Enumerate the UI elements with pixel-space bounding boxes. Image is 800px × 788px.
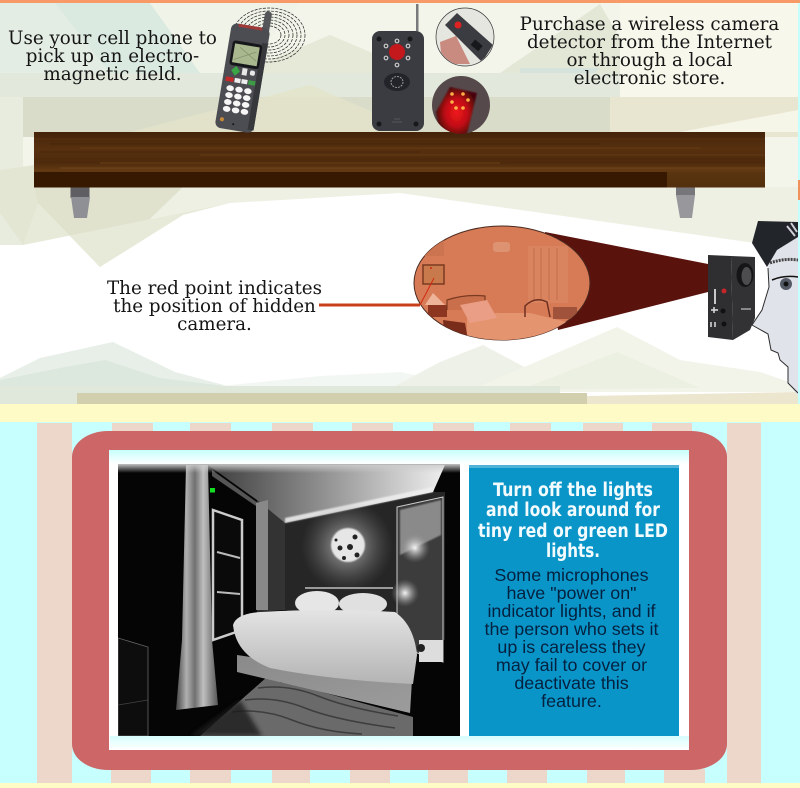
heading: tiny red or green LED <box>478 521 668 542</box>
left instruction text: pick up an electro- <box>26 46 199 67</box>
red rounded frame <box>72 431 727 770</box>
right instruction text: detector from the Internet <box>527 32 773 53</box>
caption: red point: the position of hidden <box>113 296 316 317</box>
mirror <box>397 497 443 662</box>
right instruction text: or through a local <box>566 50 733 71</box>
body text: deactivate this <box>514 673 629 693</box>
back wall <box>285 492 445 640</box>
body text <box>484 565 659 711</box>
caption: red point <box>107 278 322 335</box>
callout line <box>319 304 420 306</box>
wooden shelf <box>34 132 765 218</box>
body text: the person who sets it <box>484 619 659 639</box>
icon: hand holding detector in circle <box>436 8 494 66</box>
illustration: face profile <box>752 221 798 396</box>
curtains <box>176 465 218 710</box>
top orange band <box>0 0 800 3</box>
rug <box>200 677 413 736</box>
body text: Some microphones <box>494 565 649 585</box>
right instruction text: electronic store. <box>574 68 725 89</box>
phone body <box>215 6 273 134</box>
side table <box>118 638 148 736</box>
heading: lights. <box>546 541 600 562</box>
green LED <box>210 488 215 492</box>
body text: have "power on" <box>506 583 637 603</box>
background: pale geometric landscape <box>0 0 800 405</box>
right instruction text: Purchase a wireless camera <box>520 14 779 35</box>
lower panel backdrop <box>0 422 800 788</box>
heading: and look around for <box>486 500 661 521</box>
electromagnetic field sphere <box>233 8 305 62</box>
heading <box>478 480 668 562</box>
photo: dark hotel bedroom with green LED <box>118 464 460 736</box>
caption: red point: camera. <box>177 314 252 335</box>
ceiling <box>208 465 445 523</box>
caption: red point: The red point indicates <box>107 278 322 299</box>
magnified room view through lens <box>414 226 590 340</box>
yellow divider band <box>0 404 800 423</box>
beam from detector to room <box>545 232 708 330</box>
shelf and pillows <box>305 587 393 589</box>
left instruction text <box>8 28 217 85</box>
illustration: handheld camera detector <box>708 255 755 340</box>
body text: may fail to cover or <box>496 655 647 675</box>
text panel: blue <box>469 465 679 736</box>
nightstand <box>419 640 443 662</box>
right instruction text <box>520 14 779 89</box>
white inner panel <box>109 450 689 750</box>
icon: cell phone with electromagnetic field <box>215 6 305 134</box>
heading: Turn off the lights <box>493 480 653 501</box>
icon: wireless camera detector <box>372 4 424 131</box>
body text: indicator lights, and if <box>487 601 656 621</box>
window door <box>213 510 242 640</box>
bed <box>237 655 412 713</box>
wall light <box>306 508 388 587</box>
left instruction text: Use your cell phone to <box>8 28 217 49</box>
left instruction text: magnetic field. <box>43 64 182 85</box>
icon: red LED lens view in circle <box>432 76 490 138</box>
body text: feature. <box>541 691 602 711</box>
body text: up is careless they <box>497 637 646 657</box>
